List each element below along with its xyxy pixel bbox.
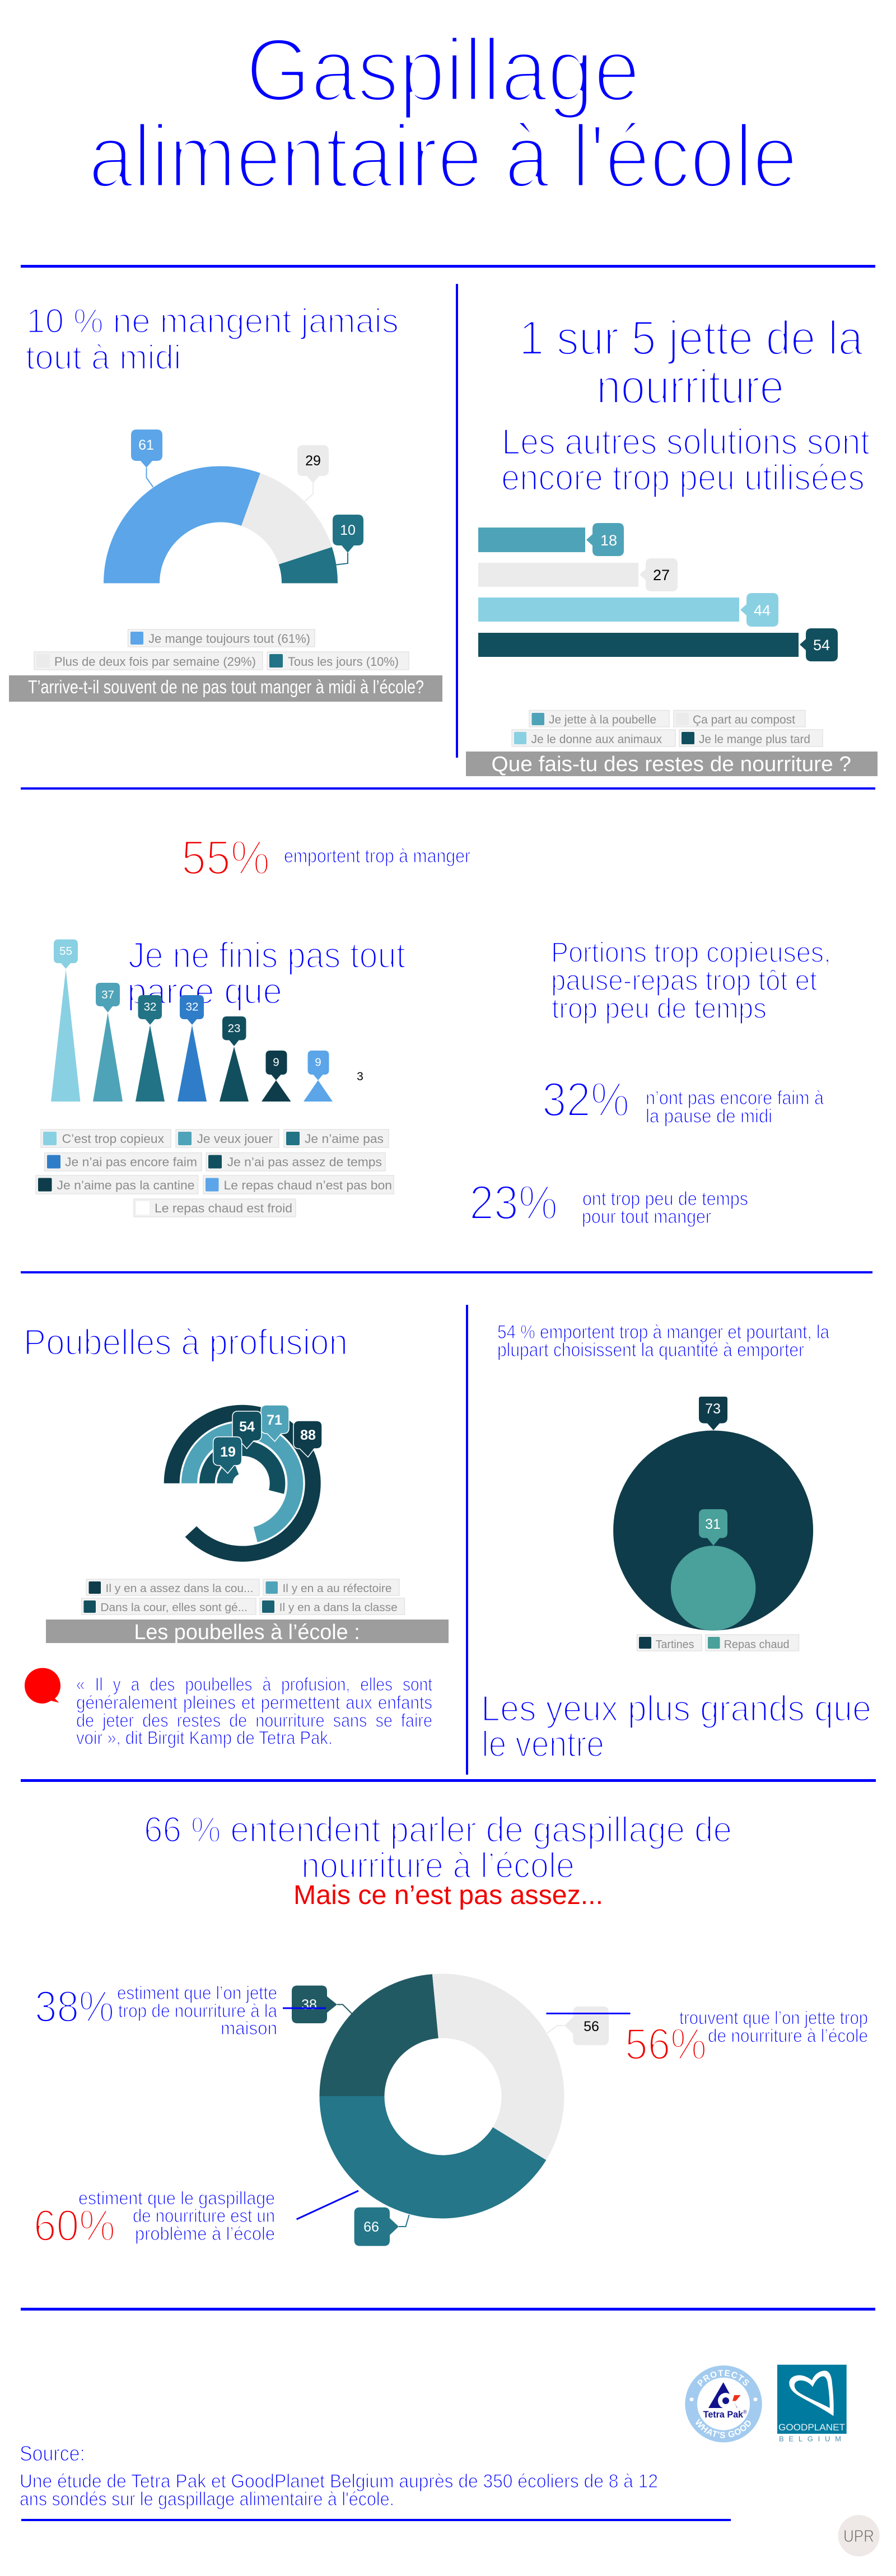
stat: 32%: la pause de midi bbox=[646, 1105, 772, 1127]
bubble chart: 73 bbox=[705, 1401, 721, 1417]
text block: 54 % emportent trop: plupart choisissent la quantité à emporter bbox=[497, 1340, 804, 1361]
radial bar chart: 88 bbox=[300, 1427, 316, 1443]
stat: 60%: problème à l’école bbox=[135, 2223, 275, 2244]
banner: Les poubelles à l'école: Les poubelles à l’école : bbox=[134, 1621, 360, 1644]
legend: bar chart: Ça part au compost bbox=[693, 713, 795, 726]
panel: poubelles à profusion bbox=[24, 1322, 449, 1748]
legend: half donut: Je mange toujours tout (61%) bbox=[148, 632, 310, 646]
text block: 54 % emportent trop: 54 % emportent trop à manger et pourtant, la bbox=[497, 1322, 829, 1343]
panel: 66 % entendent parler bbox=[34, 1809, 868, 2250]
spike chart: 32 bbox=[186, 1000, 198, 1014]
source text: ans sondés sur le gaspillage alimentaire à l'école. bbox=[20, 2489, 394, 2510]
heading: 10 % ne mangent jamais tout à midi: 10 % ne mangent jamais bbox=[26, 302, 399, 340]
radial bar chart: 54 bbox=[239, 1419, 255, 1435]
heading: Je ne finis pas tout parce que: Je ne finis pas tout bbox=[128, 935, 405, 976]
text block: Portions trop copieuses bbox=[551, 936, 831, 1024]
donut chart: 38 bbox=[301, 1997, 317, 2013]
stat: 60%: estiment que le gaspillage bbox=[78, 2187, 275, 2209]
question banner bbox=[9, 675, 442, 702]
stat: 55% bbox=[181, 831, 470, 885]
bar chart: 54 bbox=[813, 637, 830, 654]
legend: spike chart: Je n’ai pas encore faim bbox=[65, 1155, 197, 1169]
legend: radial bar chart: Il y en a assez dans la cou... bbox=[105, 1583, 253, 1595]
stat: 38%: estiment que l’on jette bbox=[117, 1982, 277, 2003]
panel: je ne finis pas tout bbox=[36, 831, 831, 1230]
donut chart: 56 bbox=[584, 2019, 599, 2034]
heading: Je ne finis pas tout parce que bbox=[127, 935, 405, 1011]
legend: bar chart: Je jette à la poubelle bbox=[549, 713, 656, 726]
legend: radial bar chart bbox=[82, 1579, 404, 1614]
question banner: T’arrive-t-il souvent de ne pas tout manger à midi à l’école? bbox=[28, 676, 424, 697]
text block: 54 % emportent trop bbox=[497, 1322, 829, 1361]
radial bar chart: 19 bbox=[220, 1444, 236, 1460]
legend: spike chart: Je veux jouer bbox=[197, 1132, 273, 1146]
title: alimentaire à l'école bbox=[88, 106, 797, 206]
legend: bar chart bbox=[512, 710, 823, 746]
heading: 10 % ne mangent jamais tout à midi: tout à midi bbox=[26, 338, 181, 376]
donut chart bbox=[292, 1974, 609, 2246]
legend: radial bar chart: Dans la cour, elles sont gé... bbox=[100, 1602, 248, 1614]
stat: 60%: de nourriture est un bbox=[133, 2205, 275, 2226]
legend: radial bar chart: Il y en a dans la classe bbox=[279, 1602, 398, 1614]
stat: 32% bbox=[542, 1073, 824, 1127]
heading: Je ne finis pas tout parce que: parce que bbox=[127, 970, 282, 1011]
heading: 1 sur 5 jette de la nourriture: 1 sur 5 jette de la bbox=[519, 311, 863, 365]
logo: Tetra Pak: PROTECTS bbox=[697, 2370, 749, 2387]
panel: les yeux plus grands que le ventre bbox=[481, 1322, 871, 1764]
panel: 1 sur 5 jette de la nourriture bbox=[466, 311, 878, 776]
heading: Poubelles à profusion: Poubelles à profusion bbox=[24, 1322, 348, 1362]
stat: 56%: de nourriture à l’école bbox=[708, 2025, 868, 2046]
subheading: Les autres solutions: encore trop peu utilisées bbox=[501, 457, 865, 498]
quote text bbox=[76, 1674, 432, 1748]
source text bbox=[20, 2442, 658, 2510]
legend: spike chart: Je n’ai pas assez de temps bbox=[227, 1155, 382, 1169]
legend: bubble chart bbox=[637, 1635, 799, 1651]
legend: radial bar chart: Il y en a au réfectoire bbox=[282, 1583, 392, 1595]
legend: spike chart: Je n’aime pas la cantine bbox=[57, 1178, 195, 1192]
question banner: Que fais-tu des restes de nourriture ? bbox=[492, 753, 851, 776]
logo: Tetra Pak: WHAT'S GOOD bbox=[696, 2419, 751, 2438]
stat: 60%: 60% bbox=[34, 2200, 115, 2250]
bar chart: 44 bbox=[754, 602, 771, 619]
logo: GoodPlanet Belgium: GOODPLANET bbox=[778, 2422, 845, 2433]
text block: Portions trop copieuses: Portions trop copieuses, bbox=[551, 936, 831, 968]
stat: 55%: 55% bbox=[181, 831, 270, 885]
radial bar chart bbox=[164, 1405, 322, 1562]
stat: 32%: n’ont pas encore faim à bbox=[646, 1088, 824, 1109]
source text: Une étude de Tetra Pak et GoodPlanet Belgium auprès de 350 écoliers de 8 à 12 bbox=[20, 2471, 658, 2492]
spike chart: 9 bbox=[273, 1056, 279, 1068]
subheading: Mais ce n'est pas assez: Mais ce n’est pas assez... bbox=[293, 1880, 603, 1910]
spike chart: 32 bbox=[144, 1000, 156, 1014]
stat: 23%: pour tout manger bbox=[582, 1206, 711, 1228]
stat: 23%: 23% bbox=[469, 1176, 558, 1230]
logo: Tetra Pak bbox=[685, 2365, 762, 2443]
half donut chart: 61 bbox=[138, 437, 154, 453]
heading: 66 % entendent parler de gaspillage: 66 % entendent parler de gaspillage de bbox=[144, 1809, 732, 1850]
radial bar chart: 71 bbox=[267, 1412, 282, 1428]
heading: 10 % ne mangent jamais tout à midi bbox=[26, 302, 399, 376]
subheading: Les autres solutions bbox=[501, 421, 870, 498]
text block: Portions trop copieuses: pause-repas trop tôt et bbox=[551, 964, 817, 996]
stat: 38%: trop de nourriture à la bbox=[118, 2000, 278, 2021]
spike chart: 55 bbox=[59, 945, 72, 958]
legend: bubble chart: Tartines bbox=[656, 1639, 694, 1651]
heading: Les yeux plus grands que le ventre bbox=[481, 1688, 871, 1764]
half donut chart bbox=[104, 430, 363, 584]
spike chart: 37 bbox=[101, 988, 114, 1001]
stat: 60% bbox=[34, 2187, 275, 2250]
icon: red speech bubble bbox=[25, 1668, 60, 1704]
legend: bar chart: Je le mange plus tard bbox=[699, 733, 810, 746]
spike chart: 23 bbox=[228, 1022, 240, 1035]
legend: bar chart: Je le donne aux animaux bbox=[531, 733, 662, 746]
panel: 10 % ne mangent jamais bbox=[9, 302, 442, 702]
spike chart: 9 bbox=[315, 1056, 321, 1068]
heading: Les yeux plus grands que le ventre: le ventre bbox=[482, 1724, 604, 1764]
legend: spike chart: C’est trop copieux bbox=[62, 1132, 164, 1146]
spike chart: 3 bbox=[357, 1070, 363, 1083]
legend: bubble chart: Repas chaud bbox=[724, 1639, 790, 1651]
legend: spike chart: Le repas chaud est froid bbox=[155, 1201, 292, 1215]
bubble chart: 31 bbox=[705, 1516, 721, 1532]
bar chart: 18 bbox=[600, 532, 617, 549]
stat: 56%: trouvent que l’on jette trop bbox=[679, 2007, 868, 2028]
badge: UPR: UPR bbox=[843, 2526, 874, 2546]
bubble chart bbox=[613, 1397, 813, 1631]
stat: 55%: emportent trop à manger bbox=[284, 846, 470, 867]
legend: half donut: Tous les jours (10%) bbox=[288, 655, 399, 669]
stat: 23% bbox=[469, 1176, 748, 1230]
stat: 56% bbox=[625, 2007, 868, 2069]
bar chart bbox=[478, 523, 838, 661]
stat: 32%: 32% bbox=[542, 1073, 629, 1127]
legend: spike chart: Le repas chaud n’est pas bon bbox=[224, 1178, 392, 1192]
logo: GoodPlanet Belgium bbox=[777, 2365, 847, 2443]
badge: UPR bbox=[838, 2515, 880, 2556]
heading: 66 % entendent parler de gaspillage: nourriture à l’école bbox=[301, 1845, 575, 1886]
logo: Tetra Pak: Tetra Pak bbox=[703, 2409, 744, 2420]
donut chart: 66 bbox=[363, 2219, 379, 2235]
quote text: généralement pleines et permettent aux enfants bbox=[76, 1692, 432, 1712]
heading: 1 sur 5 jette de la nourriture bbox=[519, 311, 863, 414]
subheading: Les autres solutions: Les autres solutions sont bbox=[502, 421, 870, 462]
stat: 38% bbox=[35, 1981, 278, 2038]
text block: Portions trop copieuses: trop peu de temps bbox=[552, 992, 767, 1024]
source text: Source: bbox=[20, 2442, 85, 2466]
logo: GoodPlanet Belgium: BELGIUM bbox=[779, 2435, 846, 2443]
stat: 23%: ont trop peu de temps bbox=[582, 1188, 748, 1210]
title bbox=[88, 20, 797, 206]
legend: spike chart bbox=[36, 1130, 394, 1217]
title: Gaspillage bbox=[246, 20, 640, 120]
legend: half donut bbox=[34, 629, 409, 670]
bar chart: 27 bbox=[653, 567, 670, 584]
half donut chart: 10 bbox=[340, 522, 356, 538]
stat: 56%: 56% bbox=[625, 2019, 707, 2069]
heading: Les yeux plus grands que le ventre: Les yeux plus grands que bbox=[481, 1688, 871, 1729]
quote text: voir », dit Birgit Kamp de Tetra Pak. bbox=[76, 1727, 333, 1748]
half donut chart: 29 bbox=[305, 453, 321, 469]
quote text: « Il y a des poubelles à profusion, elles sont bbox=[76, 1674, 432, 1695]
stat: 38%: maison bbox=[221, 2018, 277, 2038]
heading: 66 % entendent parler de gaspillage bbox=[144, 1809, 732, 1886]
stat: 38%: 38% bbox=[35, 1981, 114, 2031]
quote text: de jeter des restes de nourriture sans se faire bbox=[76, 1710, 432, 1730]
banner: Les poubelles à l'école bbox=[46, 1620, 449, 1644]
heading: 1 sur 5 jette de la nourriture: nourriture bbox=[596, 360, 784, 414]
logo: Tetra Pak: ® bbox=[743, 2409, 747, 2415]
legend: half donut: Plus de deux fois par semaine (29%) bbox=[54, 655, 256, 669]
legend: spike chart: Je n’aime pas bbox=[305, 1132, 384, 1146]
spike chart bbox=[51, 940, 363, 1102]
